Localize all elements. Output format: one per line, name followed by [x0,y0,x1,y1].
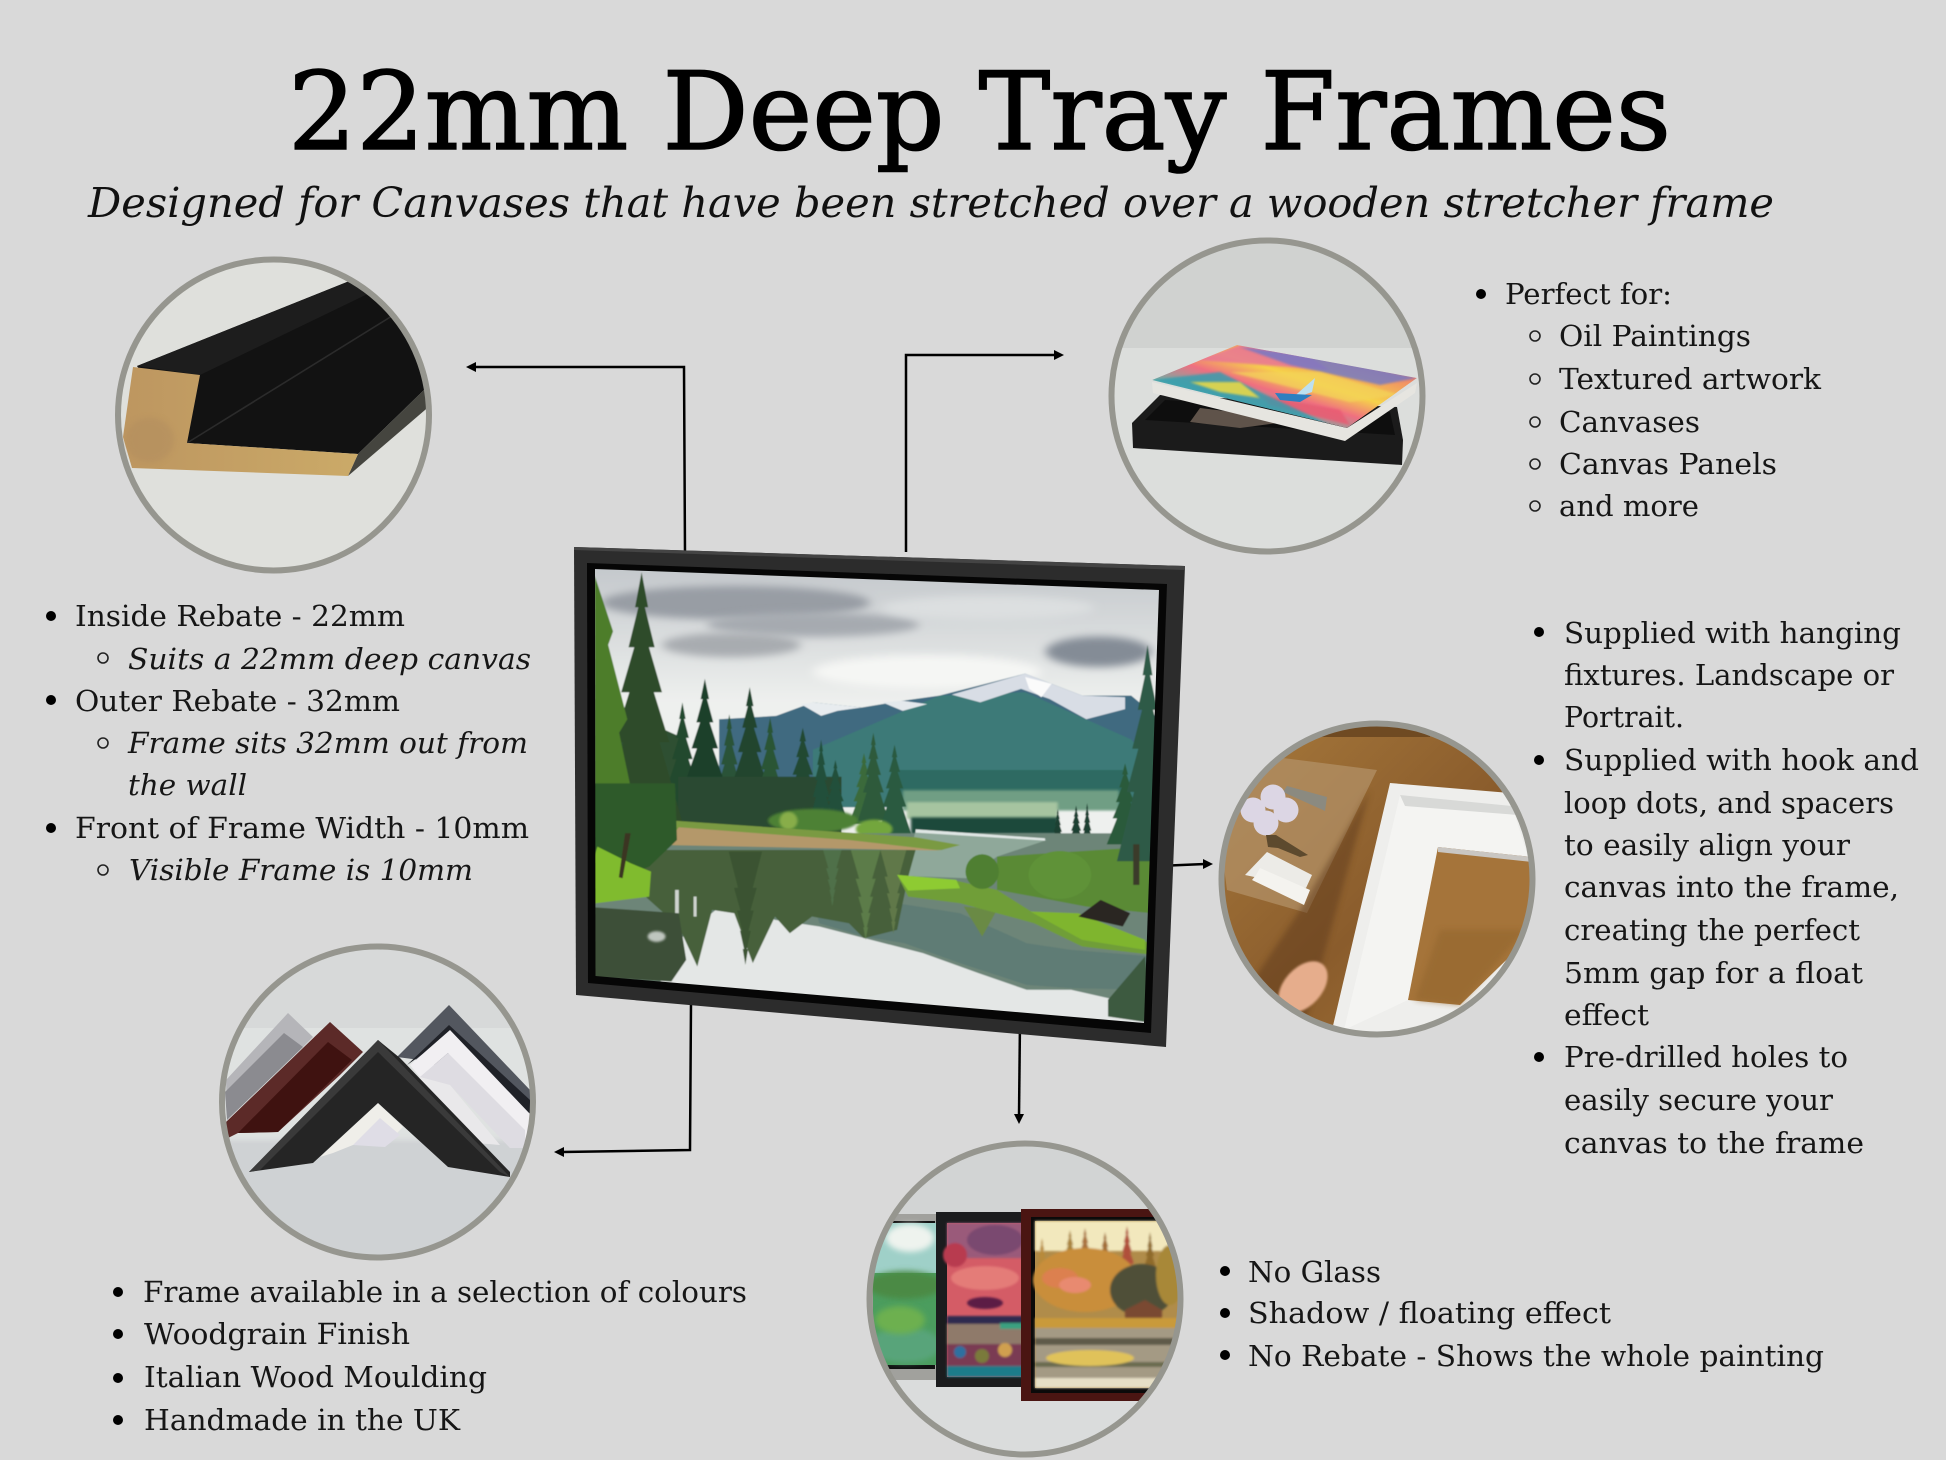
text block: perfect for list: Canvas Panels [1559,447,1777,481]
text block: fixtures and fitting: to easily align your [1564,828,1850,862]
text block: rebate specifications [46,599,531,887]
text block: rebate specifications: Outer Rebate - 32mm [75,684,400,718]
text block: fixtures and fitting: fixtures. Landscape or [1564,658,1894,692]
text block: perfect for list: and more [1559,489,1699,523]
text block: fixtures and fitting: Supplied with hook and [1564,743,1919,777]
canvas landscape painting [595,569,1159,1023]
text block: fixtures and fitting: effect [1564,998,1649,1032]
text block: fixtures and fitting: 5mm gap for a float [1564,956,1863,990]
text block: perfect for list [1476,277,1821,523]
circle photo: moulding profile [110,250,445,580]
circle photo: frame colour samples [215,940,540,1265]
text block: perfect for list: Oil Paintings [1559,319,1751,353]
text block: perfect for list: Canvases [1559,405,1700,439]
text block: colours and finish: Handmade in the UK [144,1403,461,1437]
text block: no glass benefits: No Glass [1248,1255,1381,1289]
text block: colours and finish [113,1275,747,1437]
text block: perfect for list: Perfect for: [1505,277,1672,311]
text block: rebate specifications: the wall [128,768,247,802]
arrow: to canvas in tray [906,350,1064,552]
circle photo: fixtures on wooden table [1215,715,1540,1040]
arrow: to moulding profile [466,362,685,555]
text block: colours and finish: Woodgrain Finish [144,1317,410,1351]
text block: fixtures and fitting: Supplied with hanging [1564,616,1901,650]
text block: fixtures and fitting: easily secure your [1564,1083,1833,1117]
text block: fixtures and fitting: canvas to the frame [1564,1126,1864,1160]
text block: rebate specifications: Front of Frame Width - 10mm [75,811,529,845]
central framed landscape photo [574,547,1185,1047]
text block: fixtures and fitting [1534,616,1919,1160]
tray frame [574,547,1185,1047]
text block: fixtures and fitting: canvas into the frame, [1564,870,1899,904]
text block: colours and finish: Frame available in a selection of colours [143,1275,747,1309]
subtitle: Designed for Canvases that have been stretched over a wooden stretcher frame [87,179,1774,227]
arrow: to colour samples [554,1003,691,1157]
text block: rebate specifications: Inside Rebate - 22mm [75,599,405,633]
text block: rebate specifications: Suits a 22mm deep canvas [128,642,531,676]
text block: no glass benefits: Shadow / floating effect [1248,1296,1611,1330]
text block: no glass benefits [1220,1255,1824,1373]
text block: fixtures and fitting: loop dots, and spacers [1564,786,1894,820]
text block: fixtures and fitting: Portrait. [1564,700,1684,734]
circle photo: canvas lifted out of tray [1100,230,1430,558]
title: 22mm Deep Tray Frames [288,50,1671,175]
text block: rebate specifications: Frame sits 32mm out from [127,726,528,760]
text block: perfect for list: Textured artwork [1559,362,1821,396]
arrow: to fixtures [1158,859,1213,869]
arrow: to framed paintings [1014,1020,1024,1124]
text block: no glass benefits: No Rebate - Shows the whole painting [1248,1339,1824,1373]
text block: fixtures and fitting: Pre-drilled holes to [1564,1040,1848,1074]
text block: rebate specifications: Visible Frame is 10mm [129,853,473,887]
circle photo: three framed paintings [860,1135,1201,1460]
text block: fixtures and fitting: creating the perfect [1564,913,1860,947]
text block: colours and finish: Italian Wood Moulding [144,1360,487,1394]
